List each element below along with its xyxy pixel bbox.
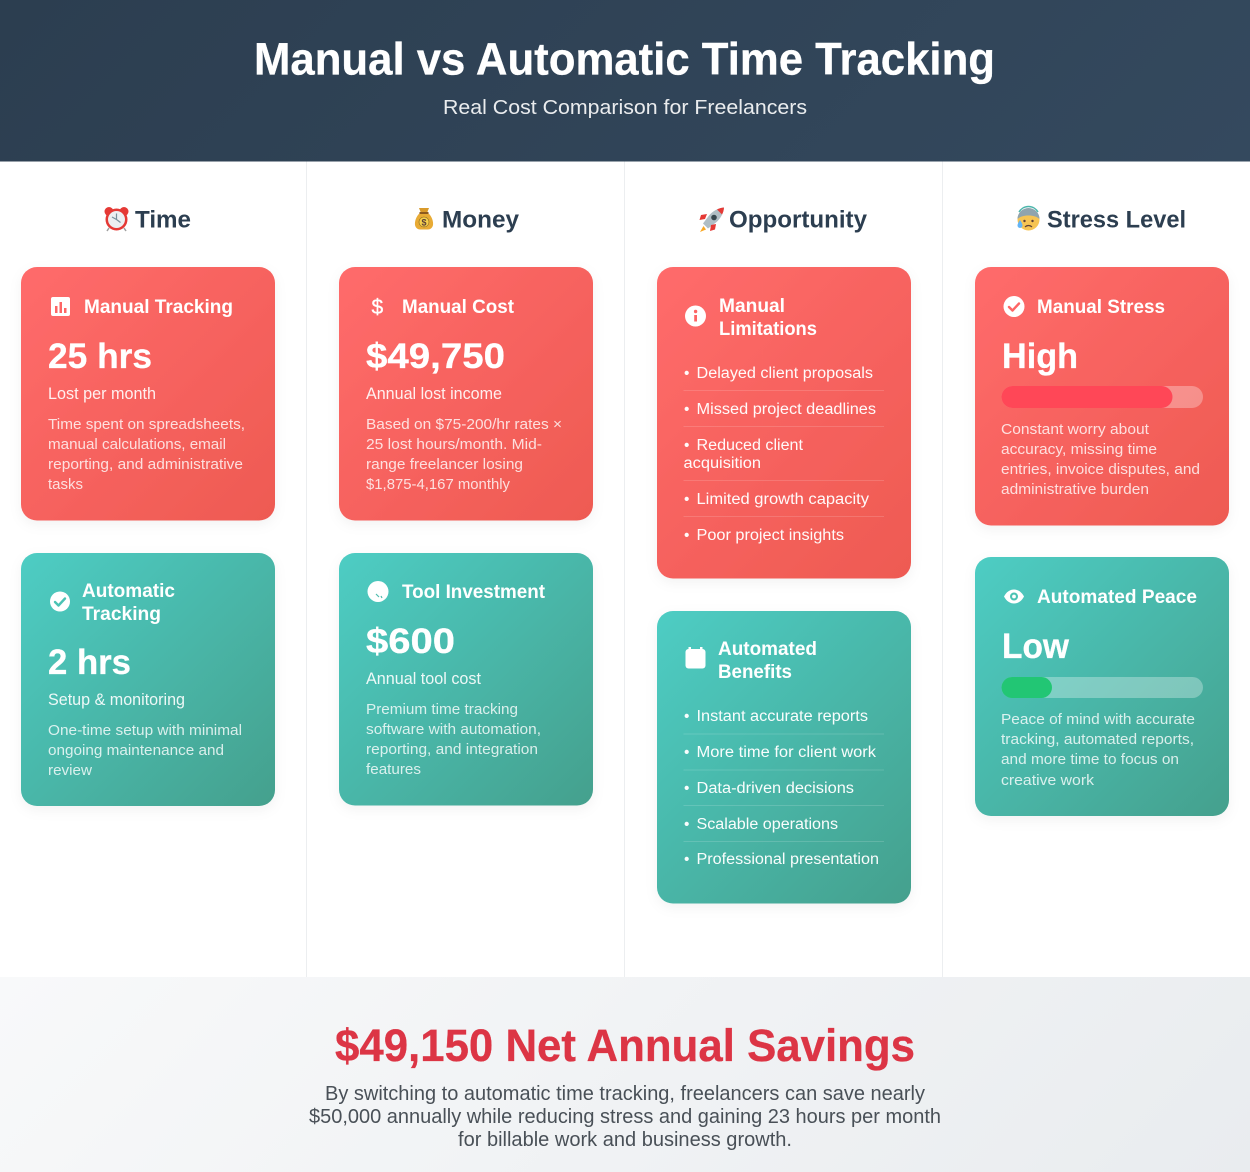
card: manual cost: $49,750 [366,336,505,376]
description: accuracy, missing time [1001,442,1157,458]
list: limitations: • [684,491,689,508]
list: benefits: • [684,780,689,797]
list: benefits: Data-driven decisions [696,780,854,797]
card: automatic tracking: Automatic [82,580,175,602]
column heading: time [104,206,191,234]
description: $1,875-4,167 monthly [366,477,511,493]
stress meter: low [1002,677,1203,698]
subtitle: Real Cost Comparison for Freelancers [443,96,807,119]
card: manual tracking: Lost per month [48,385,156,403]
description: software with automation, [366,722,541,738]
column heading: time: Time [135,206,191,234]
icon: check circle [50,592,70,612]
savings description [309,1083,941,1151]
icon: money bag: $ [421,218,427,228]
description: Constant worry about [1001,422,1149,438]
card: automated peace [975,557,1229,816]
description: manual calculations, email [48,437,226,453]
list: limitations [684,365,884,544]
description: and more time to focus on [1001,752,1179,768]
icon: eye [1004,590,1024,604]
list: benefits: • [684,816,689,833]
column heading: stress level: Stress Level [1047,206,1186,234]
header banner [0,0,1250,162]
list: benefits: Instant accurate reports [696,708,868,725]
card: automated peace: Automated Peace [1037,586,1197,608]
description [366,702,541,778]
list: limitations: • [684,437,689,454]
list: limitations: Missed project deadlines [696,401,876,418]
description: Peace of mind with accurate [1001,712,1195,728]
icon: anxious face [1018,207,1040,230]
card: tool investment: Tool Investment [402,581,545,603]
list: benefits: More time for client work [696,744,876,761]
card: automatic tracking: Setup & monitoring [48,691,185,709]
description: Time spent on spreadsheets, [48,417,245,433]
list: limitations: • [684,527,689,544]
description: Based on $75-200/hr rates × [366,417,562,433]
description: One-time setup with minimal [48,723,242,739]
description [48,417,245,493]
description: review [48,763,92,779]
savings description: for billable work and business growth. [458,1129,792,1151]
card: automated benefits [657,611,911,904]
icon: alarm clock [104,207,128,231]
icon: calendar [686,647,706,668]
description [1001,712,1195,789]
stress meter: high [1002,386,1203,408]
list: limitations: • [684,365,689,382]
card: automated benefits: Benefits [718,661,792,683]
description: range freelancer losing [366,457,523,473]
list: benefits: Professional presentation [696,851,879,868]
description [1001,422,1200,498]
card: manual tracking [21,267,275,520]
description [366,417,562,493]
icon: info [685,306,706,326]
description: entries, invoice disputes, and [1001,462,1200,478]
savings description: $50,000 annually while reducing stress and gaining 23 hours per month [309,1106,941,1128]
card: manual cost: Manual Cost [402,296,514,318]
footer: net savings [0,977,1250,1172]
savings description: By switching to automatic time tracking, freelancers can save nearly [325,1083,925,1105]
card: tool investment: $600 [366,621,455,661]
panel: money [339,206,593,806]
icon: rocket [700,208,724,232]
card: automated benefits: Automated [718,638,817,660]
card: manual stress [975,267,1229,526]
savings headline: $49,150 Net Annual Savings [335,1020,915,1071]
panel: time [21,206,275,806]
list: benefits: • [684,851,689,868]
card: automatic tracking: 2 hrs [48,642,131,682]
description [48,723,242,779]
card: automatic tracking [21,553,275,806]
card: manual limitations: Manual [719,295,785,317]
list: benefits: • [684,708,689,725]
card: manual stress: High [1002,336,1078,376]
list: limitations: Reduced client [696,437,804,454]
icon: dollar: $ [372,296,384,319]
card: manual cost: Annual lost income [366,385,502,403]
card: manual limitations: Limitations [719,318,817,340]
list: limitations: Poor project insights [696,527,844,544]
icon: pie circle [368,581,388,602]
card: automated peace: Low [1002,626,1069,666]
description: 25 lost hours/month. Mid- [366,437,542,453]
description: administrative burden [1001,482,1149,498]
description: features [366,762,421,778]
list: benefits: Scalable operations [696,816,838,833]
description: Premium time tracking [366,702,518,718]
description: tracking, automated reports, [1001,732,1194,748]
card: manual limitations [657,267,911,578]
list: limitations: acquisition [684,455,761,472]
card: tool investment: Annual tool cost [366,670,481,688]
card: manual cost [339,267,593,520]
icon: bar chart [51,297,70,316]
list: limitations: • [684,401,689,418]
card: manual tracking: 25 hrs [48,336,152,376]
list: benefits [684,708,884,868]
description: reporting, and integration [366,742,538,758]
icon: check circle [1004,296,1024,317]
description: creative work [1001,773,1095,789]
panel: stress level [975,206,1229,816]
column heading: money: Money [442,206,519,234]
card: manual tracking: Manual Tracking [84,296,233,318]
card: automatic tracking: Tracking [82,603,161,625]
title: Manual vs Automatic Time Tracking [254,34,995,84]
description: ongoing maintenance and [48,743,224,759]
description: reporting, and administrative [48,457,243,473]
panel: opportunity [657,206,911,904]
description: tasks [48,477,83,493]
card: tool investment [339,553,593,806]
list: limitations: Delayed client proposals [696,365,873,382]
column heading: opportunity: Opportunity [729,206,867,234]
card: manual stress: Manual Stress [1037,296,1165,318]
list: benefits: • [684,744,689,761]
list: limitations: Limited growth capacity [696,491,869,508]
